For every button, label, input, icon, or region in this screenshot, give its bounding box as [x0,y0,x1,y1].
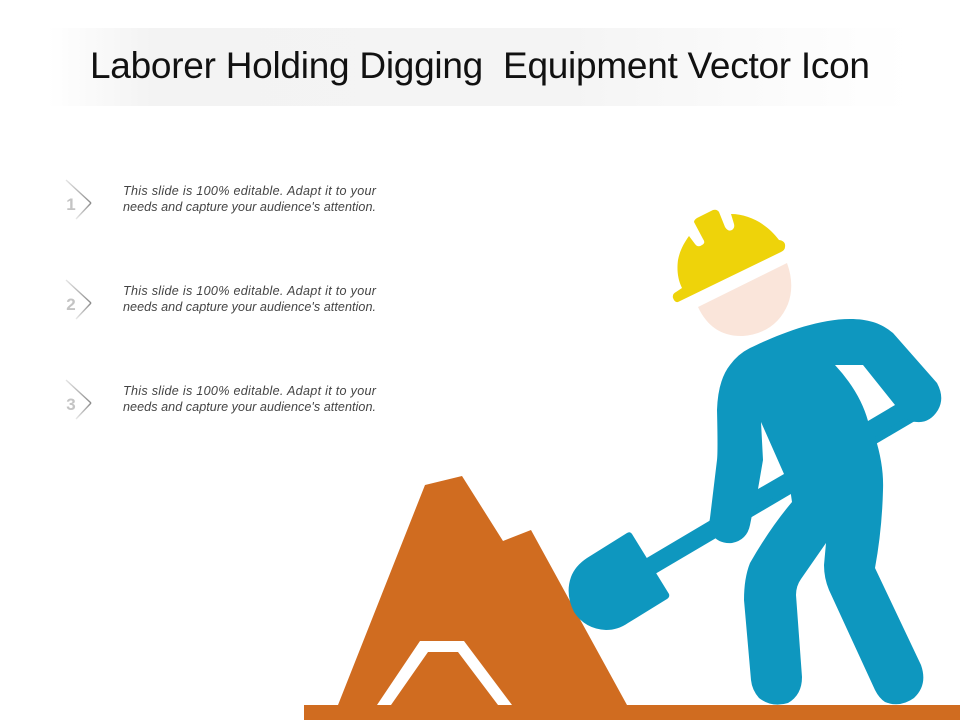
list item 1 [66,180,377,219]
hard hat [673,210,785,302]
text block 2: This slide is 100% editable. Adapt it to your [123,284,377,298]
text block 3 [123,384,377,414]
text block 2 [123,284,377,314]
text block 1: This slide is 100% editable. Adapt it to your [123,184,377,198]
title: Laborer Holding Digging Equipment Vector Icon [90,45,870,86]
number 2: 2 [66,295,76,314]
text block 1 [123,184,377,214]
number 3: 3 [66,395,76,414]
chevron 1 [66,180,91,219]
chevron 3 [66,380,91,419]
face [698,263,791,336]
dirt mound [338,476,627,705]
text block 2: needs and capture your audience's attention. [123,300,376,314]
text block 3: This slide is 100% editable. Adapt it to your [123,384,377,398]
number 1: 1 [66,195,76,214]
tunnel outline [377,641,512,705]
worker [569,210,941,705]
text block 3: needs and capture your audience's attention. [123,400,376,414]
body [709,319,941,705]
chevron 2 [66,280,91,319]
title band [48,28,912,106]
shovel blade [569,532,669,630]
list item 3 [66,380,377,419]
list item 2 [66,280,377,319]
shovel handle [645,402,920,574]
text block 1: needs and capture your audience's attention. [123,200,376,214]
ground [304,705,960,720]
shovel [569,402,920,630]
